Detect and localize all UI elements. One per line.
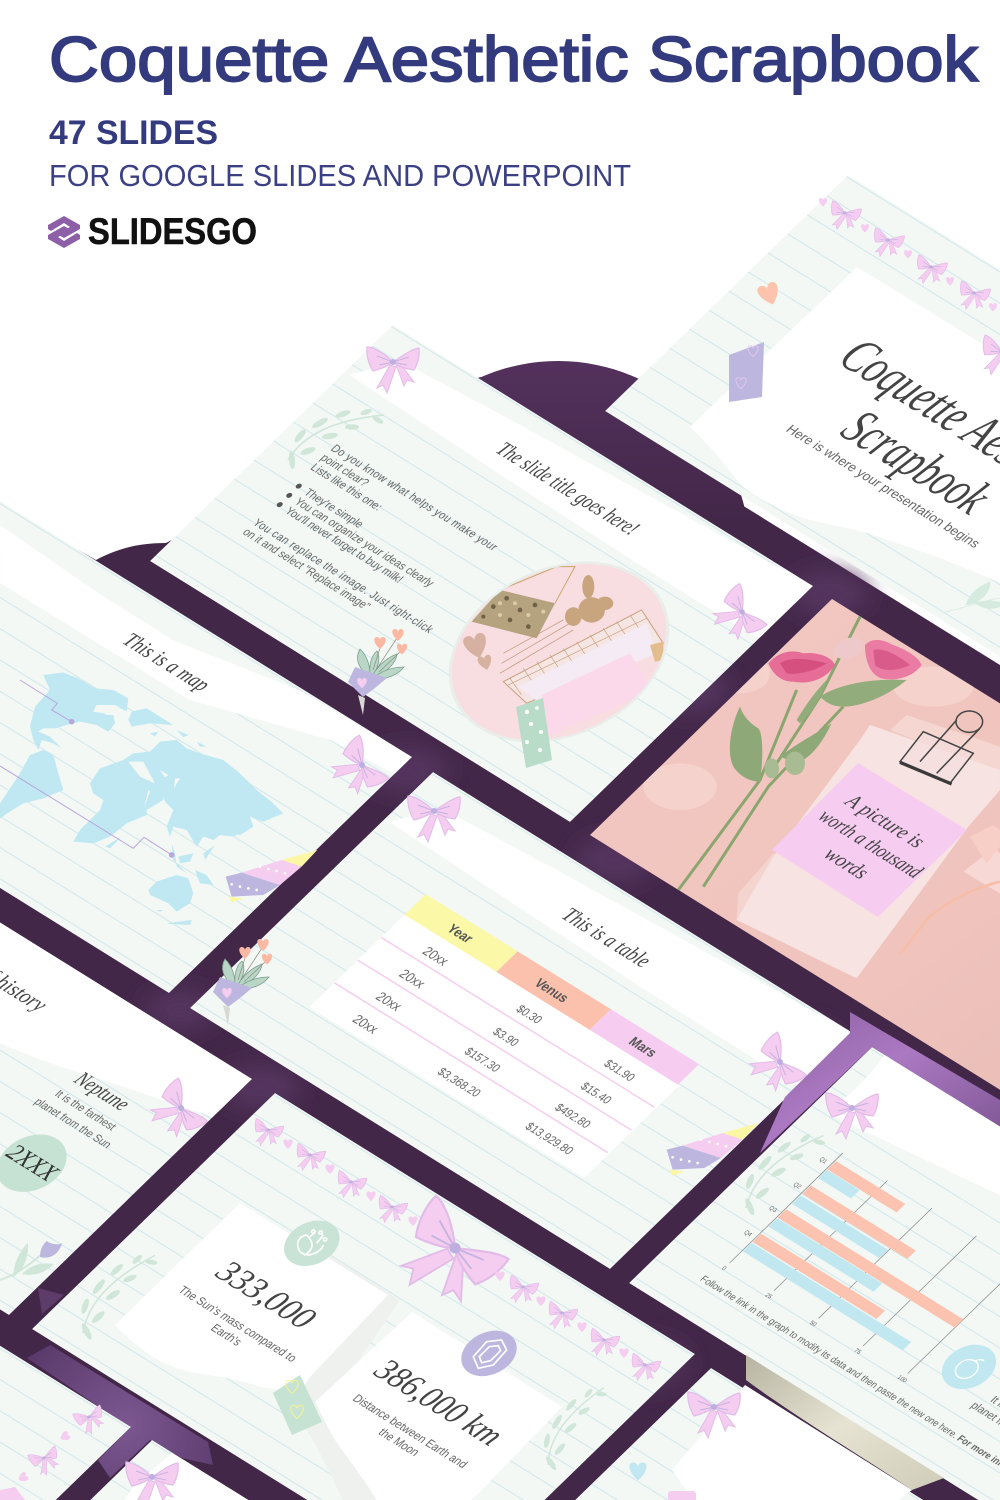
panel: photo slide <box>590 599 1000 1096</box>
icon: flower <box>0 1241 62 1280</box>
bar chart <box>711 1146 1000 1385</box>
panel: slide bottom-right <box>575 1368 923 1500</box>
card: shadow <box>270 1255 400 1500</box>
data table: $0.30 <box>513 1004 544 1026</box>
icon: potted plant <box>348 629 407 715</box>
body text: Lists like this one: <box>307 462 385 513</box>
body text: Do you know what helps you make your <box>328 443 500 553</box>
note: quote: words <box>819 843 874 884</box>
title: Coquette Aesthetic Scrapbook <box>49 25 979 95</box>
stems and leaves <box>678 617 907 890</box>
bar chart: 50 <box>808 1320 818 1328</box>
panel: stats slide: Earth's <box>207 1323 244 1349</box>
platforms subtitle: FOR GOOGLE SLIDES AND POWERPOINT <box>49 158 631 193</box>
icon: potted plant <box>213 939 272 1025</box>
world map <box>0 672 283 925</box>
tape: green polka dots <box>516 698 552 768</box>
panel: stats slide: The Sun's mass compared to <box>175 1285 299 1365</box>
light purple band above chart slide <box>760 1012 1000 1153</box>
data table: 20xx <box>372 989 406 1014</box>
icon: apple <box>942 1344 996 1390</box>
panel: title slide <box>605 175 1000 672</box>
data table: Mars <box>625 1034 661 1060</box>
bar chart: 75 <box>852 1348 862 1356</box>
panel: slide bottom-left <box>0 1346 131 1500</box>
data table: $3.90 <box>490 1026 521 1049</box>
panel: stats slide: Distance between Earth and <box>350 1393 470 1471</box>
icon: vine <box>288 408 384 469</box>
data table: $15.40 <box>577 1081 614 1107</box>
card: sun mass <box>115 1203 388 1392</box>
body text: You can organize your ideas clearly <box>291 496 437 590</box>
bar chart: Q3 <box>767 1206 778 1214</box>
photo blotches <box>643 653 973 810</box>
body text: They're simple <box>301 487 366 531</box>
icon: flower badge <box>298 1230 327 1255</box>
map pin lines <box>0 680 174 857</box>
body text: on it and select "Replace image" <box>239 527 373 613</box>
data table: 20xx <box>349 1012 382 1037</box>
icon: vine <box>730 1128 841 1217</box>
slide title: The slide title goes here! <box>491 437 645 540</box>
panel: neptune slide: 2XXX <box>0 1139 65 1187</box>
icon: binder clip <box>900 711 983 784</box>
light purple band bottom-left <box>27 1345 213 1478</box>
logo: Slidesgo: SLIDESGO <box>88 211 257 252</box>
note: quote: worth a thousand <box>813 805 928 883</box>
note: quote: A picture is <box>838 789 930 853</box>
body text: point clear? <box>317 452 371 489</box>
panel: stats slide: 333,000 <box>208 1254 324 1336</box>
data table: $13,929.80 <box>522 1121 576 1157</box>
icon: gem badge <box>473 1340 507 1368</box>
body text: You'll never forget to buy milk! <box>282 505 406 586</box>
data table: $157.30 <box>461 1046 503 1075</box>
tape: green hearts <box>273 1375 322 1435</box>
bar chart: 25 <box>763 1293 773 1301</box>
paper roll <box>746 1355 944 1490</box>
data table: $31.90 <box>601 1058 637 1084</box>
panel: text and image slide <box>150 325 813 822</box>
panel: neptune slide: Neptune <box>68 1066 136 1115</box>
panel: slide bottom-center-left <box>90 1440 248 1500</box>
panel: table slide <box>190 772 853 1269</box>
bar chart: 0 <box>720 1266 728 1272</box>
bar chart: Q1 <box>817 1157 828 1166</box>
photo: stationery flat lay <box>448 562 669 768</box>
bow row <box>250 1118 661 1385</box>
data table: Venus <box>531 975 573 1005</box>
icon: vines <box>63 1248 628 1472</box>
bar chart: Q4 <box>742 1230 753 1239</box>
data table: 20xx <box>396 966 429 991</box>
panel: map slide <box>0 496 412 993</box>
panel: chart slide <box>629 1047 1000 1500</box>
panel: stats slide <box>32 1093 695 1500</box>
data table: $492.80 <box>552 1102 593 1131</box>
panel: title slide: Here is where your presentation begins <box>783 422 983 551</box>
panel: table slide: This is a table <box>556 903 657 972</box>
body text <box>243 444 498 634</box>
purple backdrop shapes <box>0 361 1000 1500</box>
bar chart: Q2 <box>791 1182 803 1191</box>
data table <box>309 894 700 1178</box>
circle: year <box>0 1134 67 1192</box>
roses <box>768 634 922 683</box>
panel: stats slide: 386,000 km <box>366 1352 512 1452</box>
panel: stats slide: the Moon <box>375 1427 421 1459</box>
data table: $3,368.20 <box>434 1066 483 1100</box>
panel: neptune slide: planet from the Sun <box>31 1096 114 1151</box>
data table: Year <box>444 921 477 946</box>
tape: pastel <box>226 850 317 903</box>
card: distance <box>315 1312 562 1500</box>
torn paper <box>737 715 1000 978</box>
tape: pastel <box>667 1123 758 1176</box>
note: quote <box>772 763 967 917</box>
panel: neptune slide <box>0 922 252 1315</box>
panel: map slide: This is a map <box>118 628 216 696</box>
panel: neptune slide: It is the farthest <box>52 1088 119 1133</box>
slide count heading: 47 SLIDES <box>49 114 218 152</box>
body text: You can replace the image. Just right-click <box>250 517 436 636</box>
data table: 20xx <box>419 944 452 969</box>
fold: dark purple corner <box>38 1288 64 1314</box>
bar chart: 100 <box>895 1375 908 1385</box>
